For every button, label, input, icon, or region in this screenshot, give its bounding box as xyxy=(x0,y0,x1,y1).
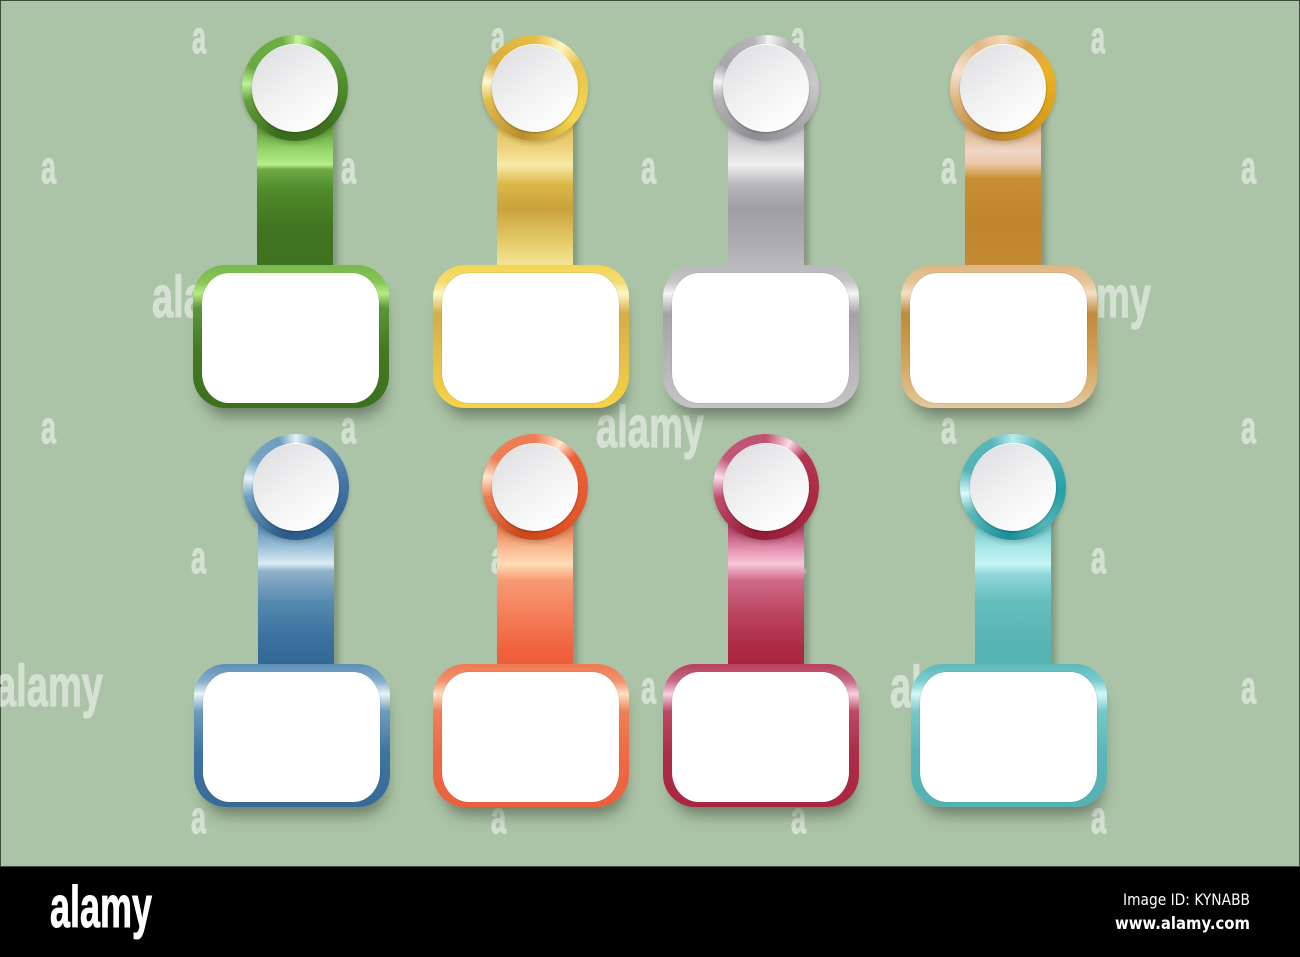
watermark pattern: a xyxy=(1241,402,1257,453)
watermark pattern: a xyxy=(791,12,806,63)
white text card xyxy=(672,672,849,802)
watermark pattern: a xyxy=(941,402,957,453)
teal frame xyxy=(911,664,1107,807)
watermark pattern: a xyxy=(791,532,807,583)
watermark pattern: a xyxy=(1241,142,1257,193)
panel: copper label xyxy=(901,35,1102,426)
white disc xyxy=(960,45,1046,132)
blue frame xyxy=(194,664,390,807)
watermark pattern: alamy xyxy=(596,395,704,460)
orange frame xyxy=(433,664,629,807)
panel: green label xyxy=(193,35,393,426)
silver ring xyxy=(713,35,819,141)
panel: gold label xyxy=(433,35,633,425)
watermark pattern: a xyxy=(191,792,207,843)
green ring xyxy=(242,35,348,141)
footer bar xyxy=(0,867,1300,957)
gold frame xyxy=(433,265,629,408)
silver frame xyxy=(663,265,859,408)
watermark pattern: a xyxy=(1091,792,1107,843)
white text card xyxy=(920,672,1097,802)
watermark pattern: a xyxy=(791,792,807,843)
watermark pattern: a xyxy=(41,142,57,193)
orange ring xyxy=(482,434,588,540)
watermark pattern: a xyxy=(641,142,657,193)
green strap xyxy=(257,115,333,266)
silver strap xyxy=(728,115,804,266)
blue strap xyxy=(258,514,334,665)
copper strap xyxy=(965,115,1041,266)
watermark pattern: a xyxy=(941,142,957,193)
white text card xyxy=(910,273,1087,403)
watermark pattern: a xyxy=(491,792,507,843)
orange strap xyxy=(497,514,573,665)
white text card xyxy=(442,273,619,403)
watermark pattern: a xyxy=(341,142,357,193)
crimson frame xyxy=(663,664,859,807)
white text card xyxy=(442,672,619,802)
copper ring xyxy=(950,35,1056,141)
watermark pattern: a xyxy=(1091,12,1106,63)
watermark pattern: a xyxy=(491,532,507,583)
white disc xyxy=(492,444,578,531)
crimson ring xyxy=(713,434,819,540)
watermark pattern: a xyxy=(641,662,657,713)
watermark pattern: a xyxy=(491,12,506,63)
white disc xyxy=(252,45,338,132)
white text card xyxy=(202,273,379,403)
white disc xyxy=(253,444,339,531)
white disc xyxy=(492,45,578,132)
panel: blue label xyxy=(194,434,394,823)
watermark pattern: alamy xyxy=(1043,265,1151,330)
watermark pattern: alamy xyxy=(152,265,260,330)
watermark pattern: a xyxy=(1241,662,1257,713)
gold ring xyxy=(482,35,588,141)
website: www.alamy.com xyxy=(1115,914,1250,934)
gold strap xyxy=(497,115,573,266)
watermark pattern: a xyxy=(191,532,207,583)
white disc xyxy=(970,444,1056,531)
watermark pattern: a xyxy=(1091,532,1107,583)
panel: silver label xyxy=(663,35,863,426)
crimson strap xyxy=(728,514,804,665)
watermark pattern: a xyxy=(41,402,57,453)
teal strap xyxy=(975,514,1051,665)
white disc xyxy=(723,45,809,132)
watermark pattern: a xyxy=(192,12,207,63)
green frame xyxy=(193,265,389,408)
panel: crimson label xyxy=(663,434,863,824)
white disc xyxy=(723,444,809,531)
copper frame xyxy=(901,265,1097,408)
image id: Image ID: KYNABB xyxy=(1123,890,1250,909)
teal ring xyxy=(960,434,1066,540)
footer logo: alamy xyxy=(50,875,152,940)
panel: teal label xyxy=(911,434,1111,823)
blue ring xyxy=(243,434,349,540)
watermark pattern: alamy xyxy=(890,655,998,720)
white text card xyxy=(672,273,849,403)
watermark pattern: a xyxy=(341,662,357,713)
watermark pattern: a xyxy=(341,402,357,453)
panel: orange label xyxy=(433,434,633,824)
white text card xyxy=(203,672,380,802)
